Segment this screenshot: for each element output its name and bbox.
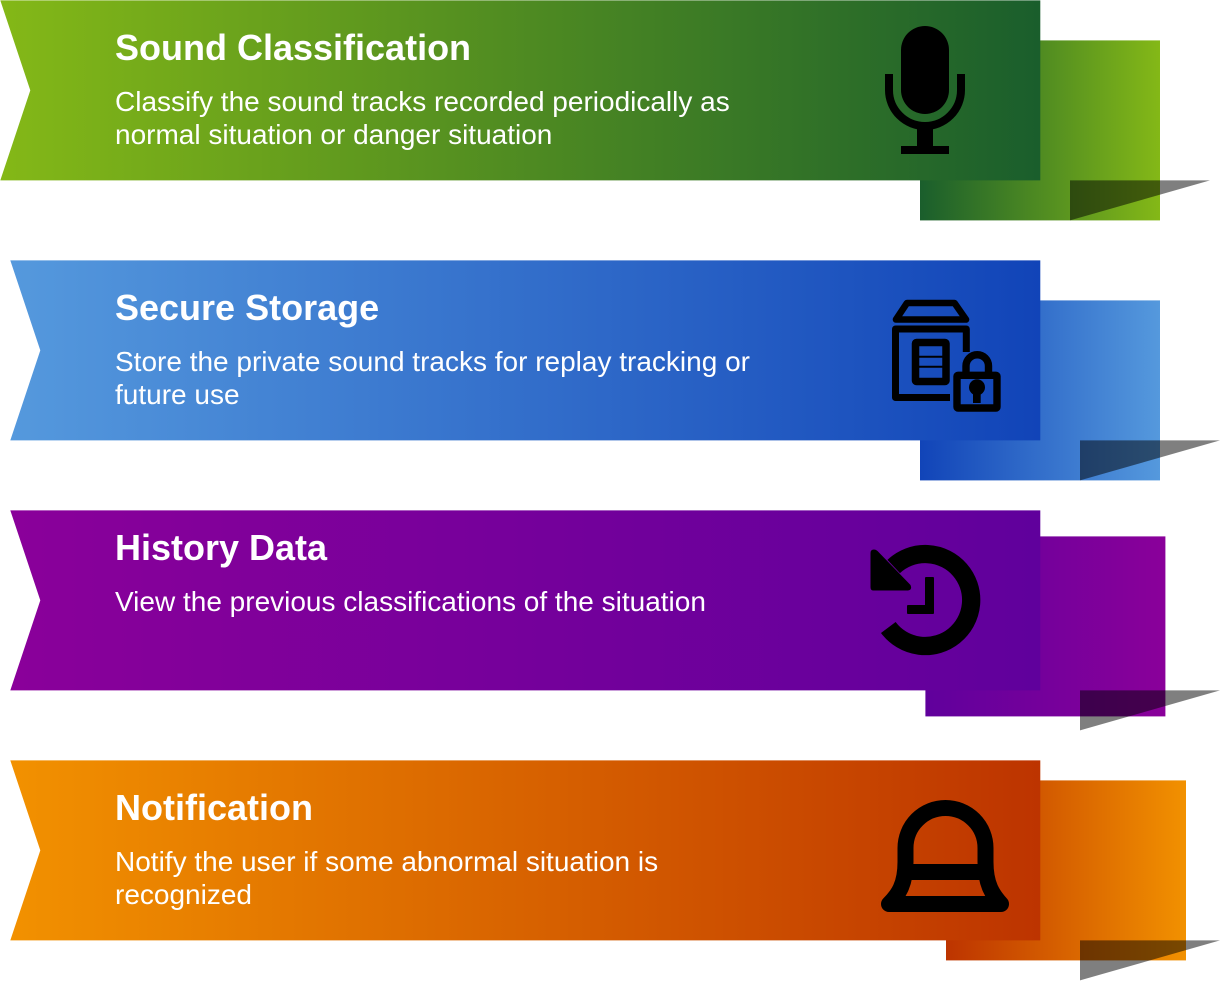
icon: history clock [870, 550, 971, 646]
ribbon fold shadow [1070, 180, 1210, 220]
panel: history data [10, 510, 1220, 730]
ribbon fold shadow [1080, 940, 1220, 980]
ribbon fold back [920, 300, 1160, 480]
heading: secure storage: Secure Storage [115, 287, 379, 328]
text: notification description: Notify the user if some abnormal situation is [115, 846, 658, 877]
heading: sound classification: Sound Classification [115, 27, 471, 68]
ribbon front [10, 510, 1040, 690]
icon: microphone [889, 26, 961, 154]
text: notification description: recognized [115, 879, 252, 910]
ribbon fold shadow [1080, 440, 1220, 480]
text: sound classification description: normal situation or danger situation [115, 119, 552, 150]
ribbon front [10, 760, 1040, 940]
text: history data description: View the previous classifications of the situation [115, 586, 706, 617]
heading: history data: History Data [115, 527, 328, 568]
text: sound classification description: Classify the sound tracks recorded periodically as [115, 86, 730, 117]
icon: locked storage box [896, 303, 997, 408]
ribbon fold back [920, 40, 1160, 220]
ribbon fold back [946, 780, 1186, 960]
text: secure storage description: future use [115, 379, 240, 410]
panel: secure storage [10, 260, 1220, 480]
panel: sound classification [0, 0, 1210, 220]
panel: notification [10, 760, 1220, 980]
heading: notification: Notification [115, 787, 313, 828]
text: secure storage description: Store the private sound tracks for replay tracking or [115, 346, 750, 377]
ribbon fold back [925, 536, 1165, 716]
ribbon fold shadow [1080, 690, 1220, 730]
ribbon front [0, 0, 1040, 180]
ribbon front [10, 260, 1040, 440]
icon: bell [889, 808, 1001, 904]
